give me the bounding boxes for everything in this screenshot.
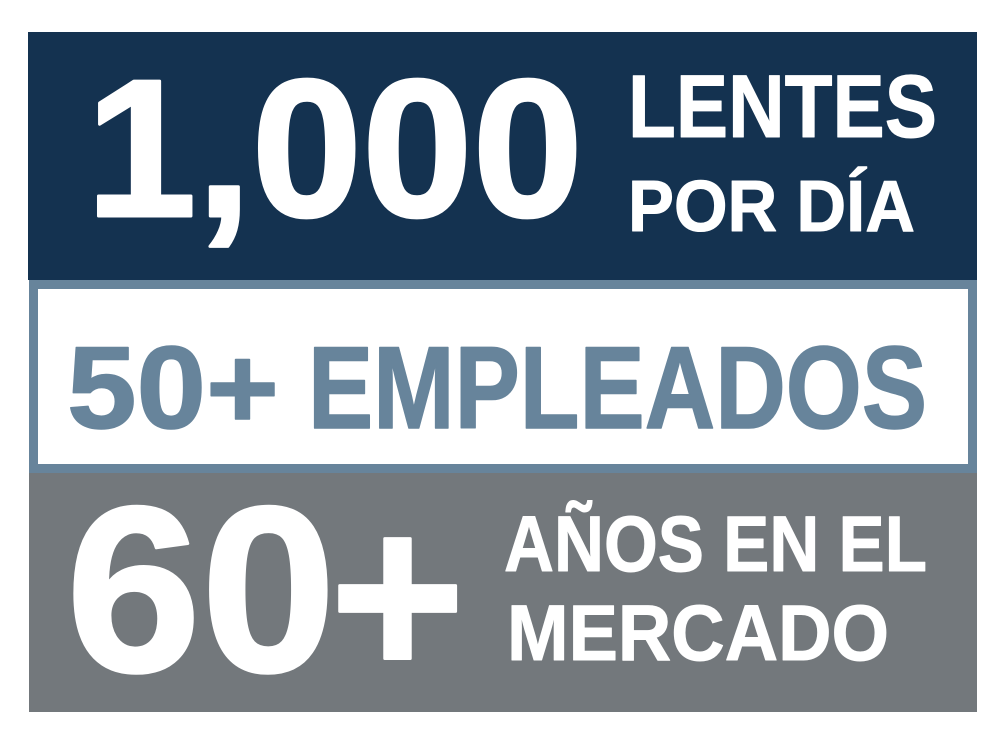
label: AÑOS EN EL: AÑOS EN EL [504, 499, 927, 588]
big number: 1,000: 1,000 [86, 39, 583, 258]
panel: employees [34, 284, 972, 468]
label: LENTES: LENTES [628, 56, 937, 156]
big number: 60: 60 [66, 458, 336, 722]
plus sign: + [330, 464, 465, 728]
panel: years in market [29, 458, 977, 728]
label: MERCADO: MERCADO [507, 588, 889, 677]
heading: 50+ EMPLEADOS: 50+ [67, 322, 279, 453]
label: POR DÍA: POR DÍA [628, 167, 915, 247]
panel: lenses per day [28, 32, 977, 280]
